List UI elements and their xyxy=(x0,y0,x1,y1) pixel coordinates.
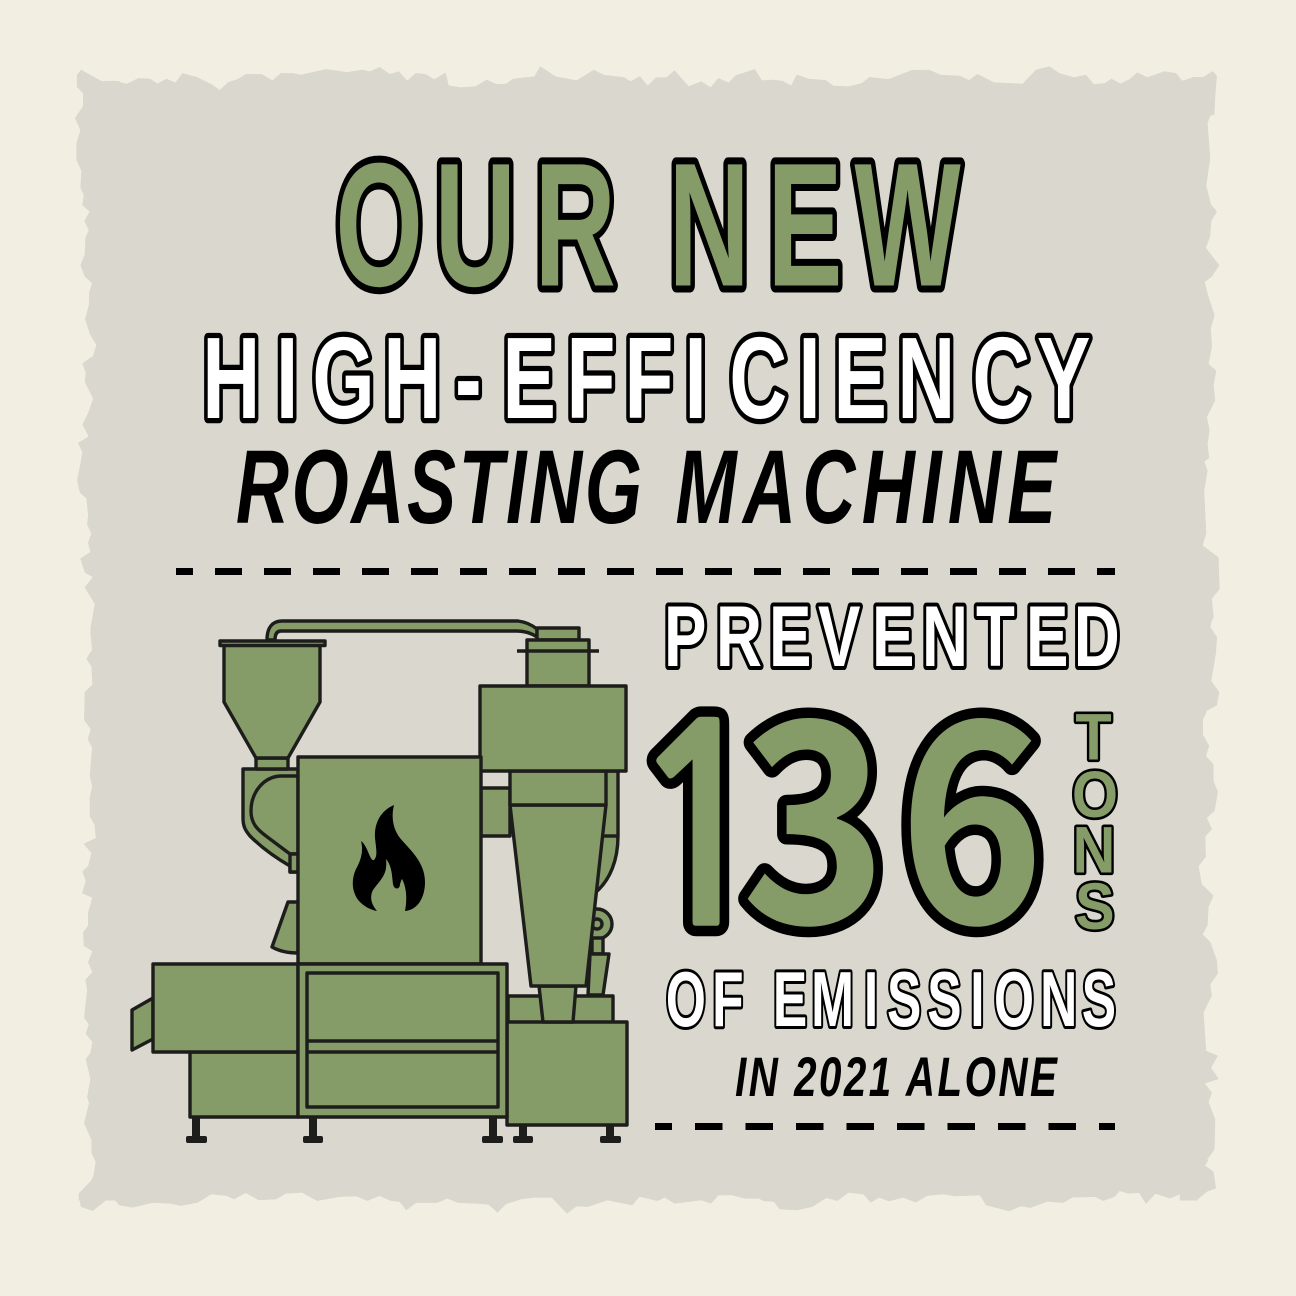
cabinet panel xyxy=(307,973,498,1107)
hopper lid xyxy=(220,641,325,646)
text: prevented: PREVENTED xyxy=(664,590,1120,685)
heading: roasting machine: ROASTING xyxy=(236,429,642,546)
chute wedge xyxy=(272,902,298,953)
main drum housing xyxy=(298,757,481,964)
motor housing xyxy=(588,954,609,995)
motor stem xyxy=(592,938,603,954)
cooling tray box xyxy=(153,964,298,1052)
cyclone collar xyxy=(510,771,606,805)
heading: our new: OUR NEW xyxy=(335,127,961,324)
text: of emissions: OF EMISSIONS xyxy=(666,956,1116,1044)
icon: flame xyxy=(353,805,425,911)
discharge flap xyxy=(132,998,153,1050)
heading: high-efficiency: HIGH-EFFICIENCY xyxy=(202,314,1090,444)
cyclone cone xyxy=(510,805,606,986)
cabinet divider xyxy=(307,1041,498,1052)
upper right box xyxy=(480,686,626,771)
stat: 136: 36 xyxy=(741,607,1044,1001)
illustration: roasting machine xyxy=(132,621,627,1143)
feeder chute xyxy=(243,769,298,872)
text: in 2021 alone: IN 2021 ALONE xyxy=(735,1047,1058,1109)
chute outlet xyxy=(290,854,298,872)
label: tons vertical: TONS xyxy=(1072,701,1118,944)
pulley hub xyxy=(592,919,602,929)
right base box xyxy=(507,1022,627,1125)
cyclone spout xyxy=(539,986,576,1022)
curved duct right xyxy=(590,771,618,892)
machine legs xyxy=(186,1117,621,1143)
hopper xyxy=(224,645,320,758)
base cabinet xyxy=(298,964,507,1117)
lower left box xyxy=(190,1052,298,1117)
duct joint xyxy=(604,834,618,838)
side duct xyxy=(481,788,510,836)
chute inner curve xyxy=(251,776,298,854)
pulley wheel xyxy=(582,909,612,939)
hopper neck xyxy=(256,758,288,769)
stat: 136: 1 xyxy=(624,695,777,967)
panel: torn paper xyxy=(75,67,1219,1213)
heading: roasting machine xyxy=(236,429,1058,546)
divider: bottom dashed line xyxy=(655,1123,1115,1130)
base shelf xyxy=(508,996,613,1023)
pipe xyxy=(267,621,537,640)
stack cap xyxy=(537,628,579,640)
divider: top dashed line xyxy=(176,568,1115,575)
heading: roasting machine: MACHINE xyxy=(675,429,1058,546)
stack xyxy=(527,640,589,686)
stack rim xyxy=(517,649,599,653)
